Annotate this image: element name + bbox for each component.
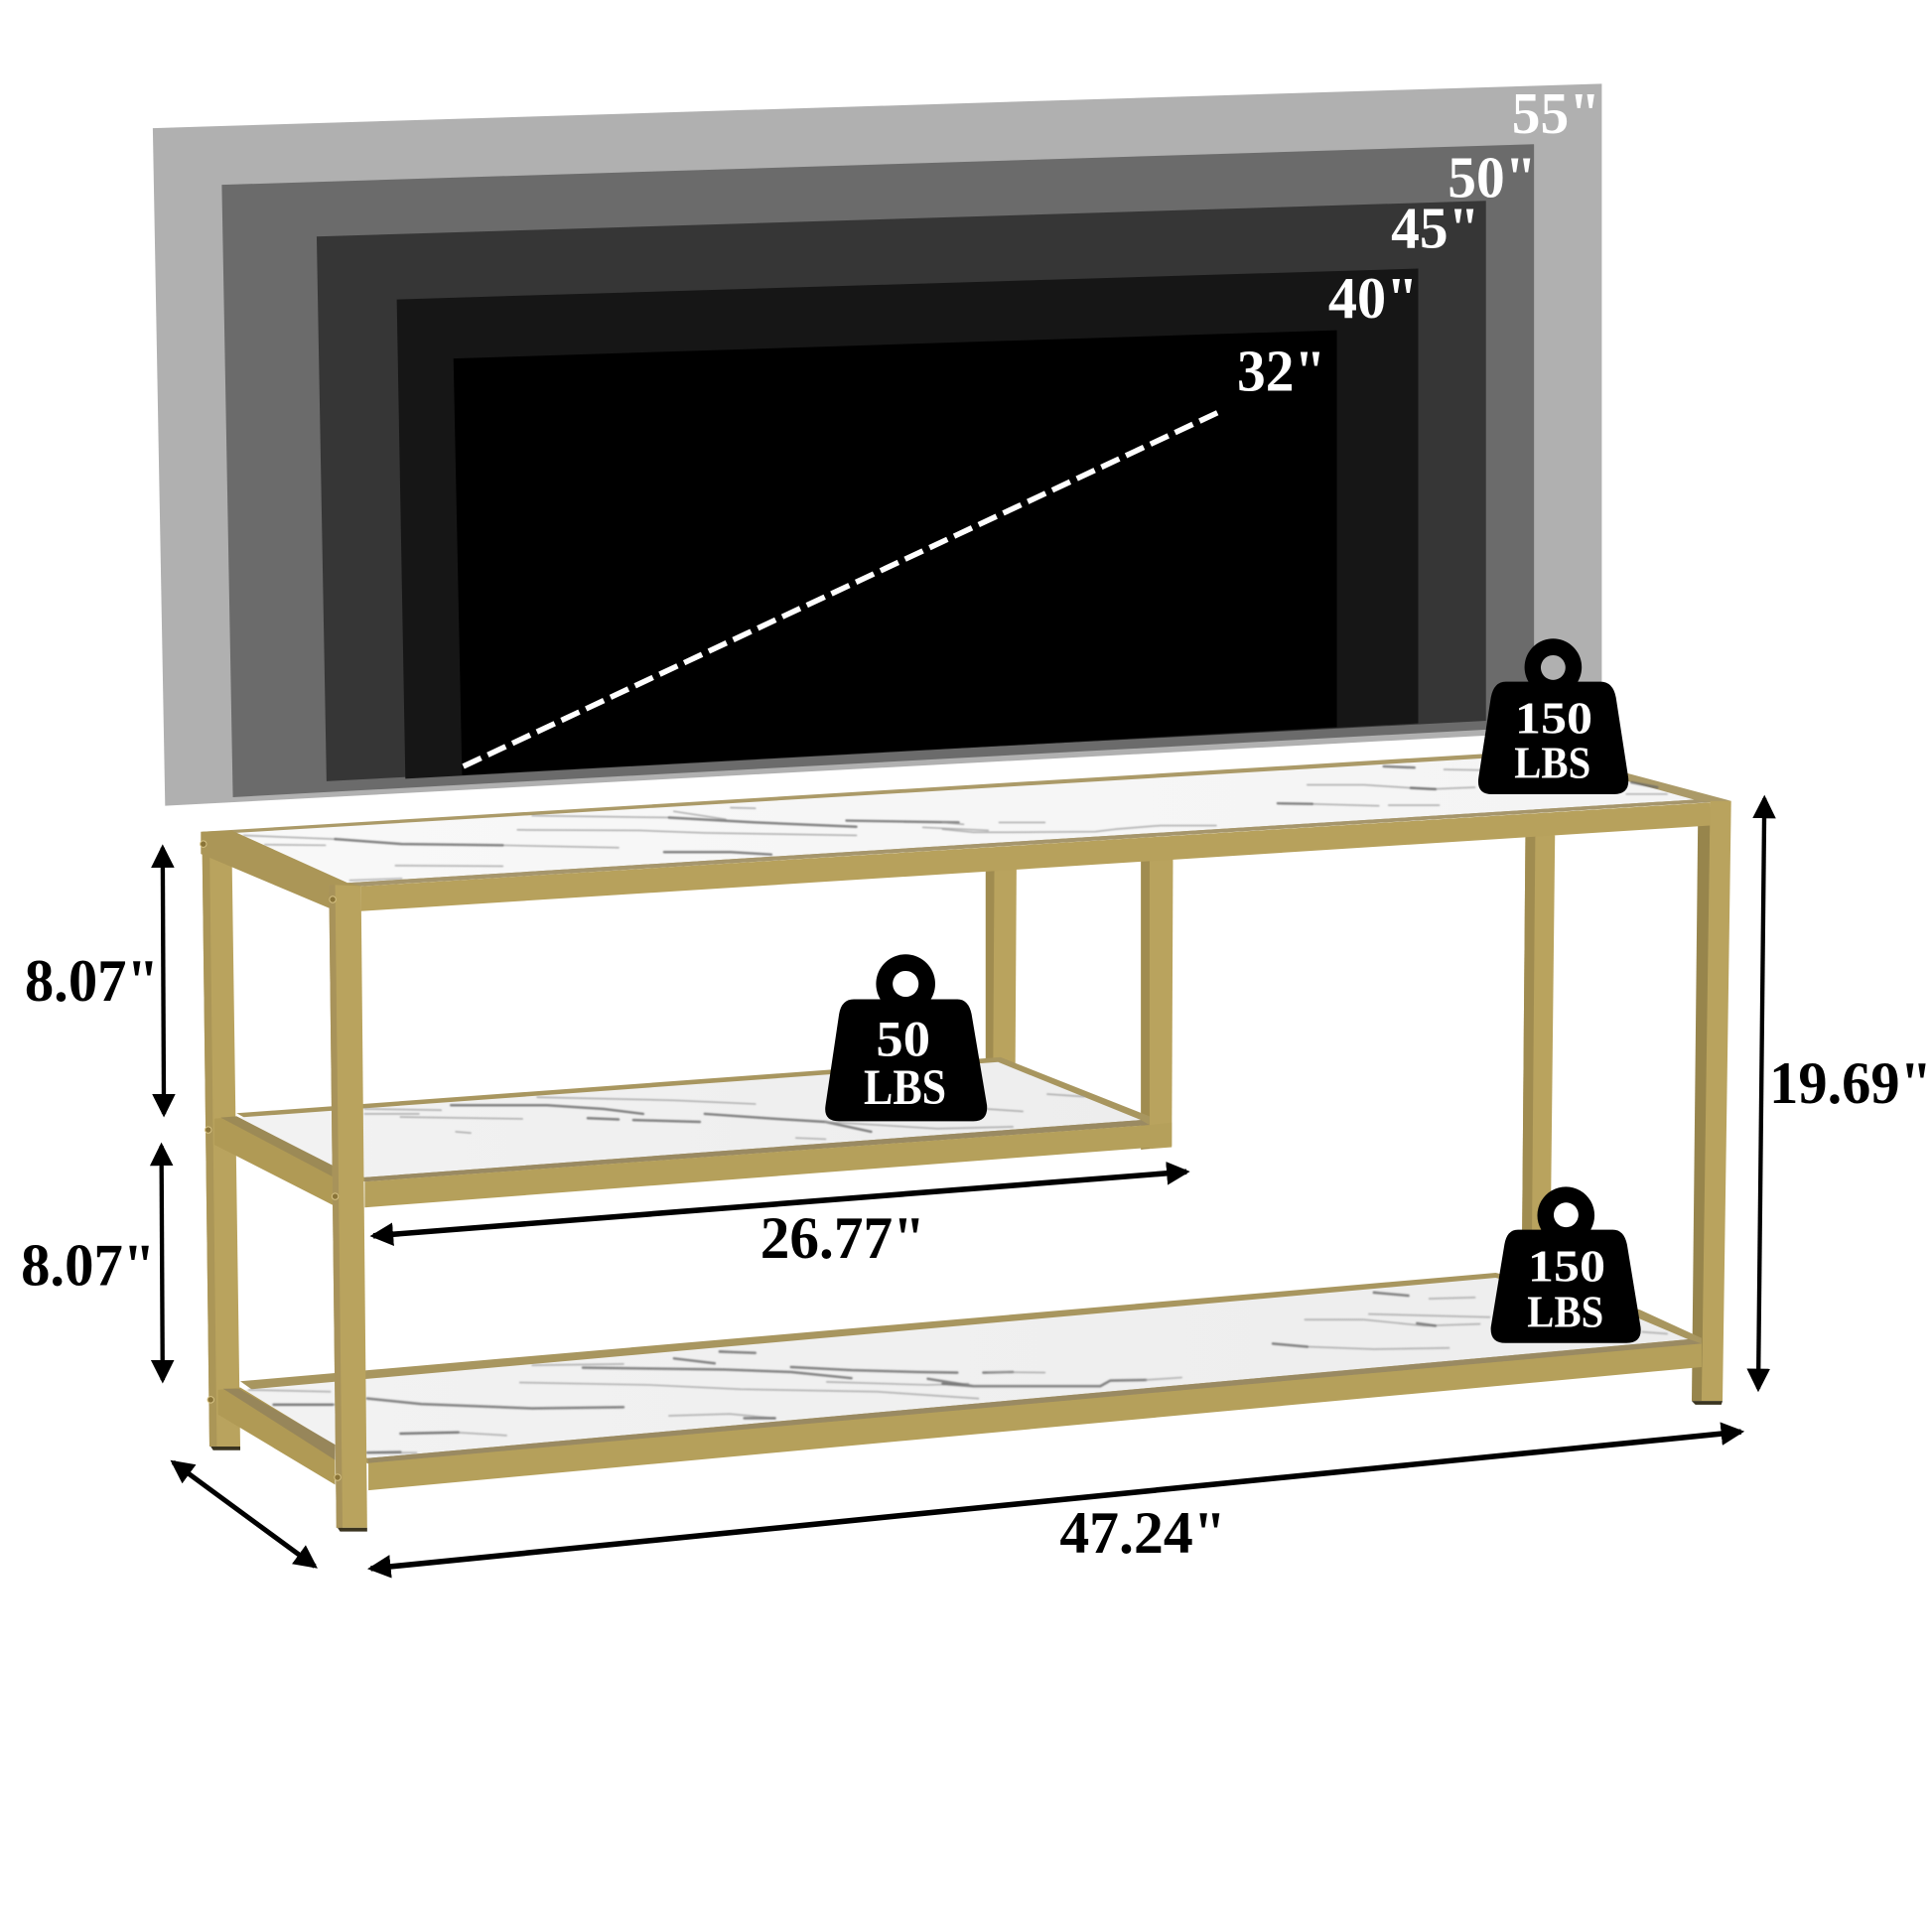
weight icon [1478, 638, 1628, 794]
label 32: 32" [1237, 338, 1325, 403]
arrow: total height [1758, 798, 1764, 1389]
weight text 150: 150 [1528, 1241, 1605, 1292]
45 inch screen [317, 201, 1486, 781]
weight icon [825, 954, 987, 1121]
arrow: middle shelf width [373, 1172, 1186, 1236]
label 40: 40" [1328, 265, 1418, 331]
weight icon [1491, 1186, 1641, 1343]
top side rail [201, 830, 361, 908]
label lower height: 8.07" [21, 1232, 155, 1299]
50 inch screen [221, 144, 1534, 797]
dimension labels [21, 948, 1932, 1567]
bottom side rail [218, 1387, 336, 1484]
top shelf [201, 751, 1731, 911]
label middle shelf width: 26.77" [760, 1205, 925, 1272]
weight text LBS: LBS [1514, 738, 1590, 788]
weight capacity: middle shelf 50 lbs [825, 954, 987, 1121]
55 inch screen [153, 83, 1601, 806]
40 inch screen [397, 269, 1418, 778]
weight text LBS: LBS [1527, 1287, 1603, 1337]
top shelf veins [244, 766, 1667, 881]
top shelf rim [203, 751, 1731, 886]
bottom shelf [218, 1273, 1702, 1490]
bottom shelf marble [244, 1278, 1688, 1458]
middle front right leg [1141, 857, 1173, 1150]
weight text 150: 150 [1515, 692, 1592, 743]
arrow: total width [371, 1432, 1741, 1569]
32 inch screen [454, 331, 1337, 775]
middle shelf [214, 1057, 1172, 1207]
dimension arrows [162, 798, 1764, 1569]
size labels [1237, 80, 1600, 403]
arrow: upper shelf height [163, 848, 164, 1114]
arrow: depth [173, 1462, 315, 1567]
middle shelf marble [238, 1062, 1141, 1177]
front right leg inner facet [1692, 823, 1711, 1401]
weight text LBS: LBS [864, 1060, 946, 1116]
weight text 50: 50 [876, 1013, 930, 1068]
middle side rail [214, 1116, 333, 1205]
weight capacity: bottom shelf 150 lbs [1491, 1186, 1641, 1343]
middle back leg [986, 866, 1017, 1069]
front left leg [329, 885, 367, 1528]
back legs [203, 823, 1711, 1450]
top front rail [361, 802, 1711, 911]
back left leg [203, 838, 240, 1447]
back right leg [1522, 835, 1555, 1282]
top shelf front band [347, 799, 1711, 887]
label 45: 45" [1391, 195, 1480, 260]
weight capacity: top shelf 150 lbs [1478, 638, 1628, 794]
top shelf marble [234, 756, 1694, 883]
label total width: 47.24" [1059, 1500, 1226, 1567]
bolts [201, 841, 341, 1480]
tv size comparison [153, 83, 1601, 806]
middle shelf veins [364, 1094, 1084, 1139]
arrow: lower shelf height [162, 1146, 163, 1380]
label 50: 50" [1448, 145, 1537, 210]
middle front rail [364, 1123, 1172, 1207]
front legs [201, 801, 1731, 1532]
bottom shelf rim [240, 1273, 1702, 1463]
bottom shelf veins [249, 1293, 1667, 1452]
middle shelf front band [364, 1120, 1150, 1181]
front right leg [1702, 801, 1731, 1401]
bottom shelf front band [367, 1339, 1702, 1463]
bottom front rail [368, 1343, 1702, 1490]
diagonal dashed line [464, 413, 1217, 766]
middle shelf rim [236, 1057, 1150, 1181]
label upper height: 8.07" [25, 948, 159, 1015]
label 55: 55" [1512, 80, 1600, 146]
